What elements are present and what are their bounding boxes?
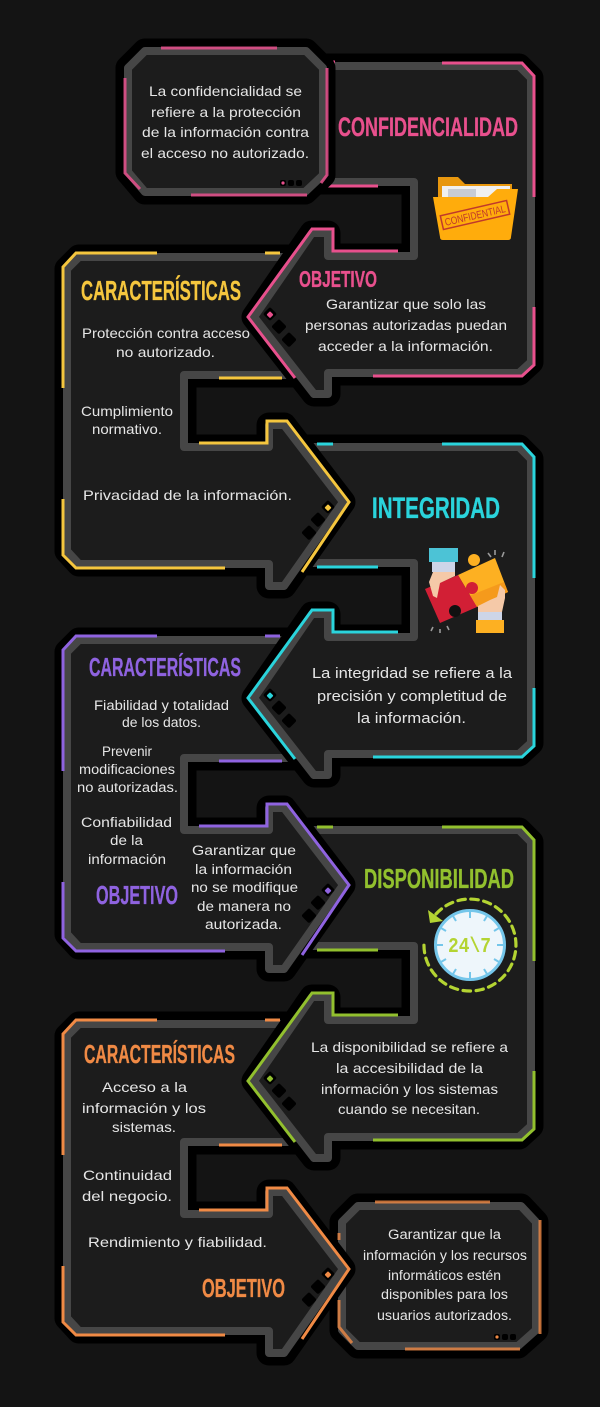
text: integrity definition: la información. <box>357 710 466 727</box>
panel: integridad características arrow <box>63 636 349 969</box>
text: integrity objective: de manera no <box>197 899 291 914</box>
text: confidentiality definition: La confidencialidad se <box>149 83 302 99</box>
text: características disponibilidad: Acceso a la <box>102 1079 187 1095</box>
text: availability objective: usuarios autorizados. <box>377 1308 512 1323</box>
text: características confidencialidad: Cumplimiento <box>81 403 173 419</box>
text: availability definition: La disponibilidad se refiere a <box>311 1039 508 1055</box>
text: características integridad: información <box>88 852 166 867</box>
text: integrity definition <box>312 665 513 727</box>
panel: confidentiality definition callout <box>125 48 327 195</box>
heading: disponibilidad: DISPONIBILIDAD <box>364 863 514 894</box>
text: availability objective: información y los recursos <box>363 1248 527 1263</box>
icon: 24/7 clock: 24\7 <box>448 936 491 959</box>
text: características disponibilidad <box>82 1079 267 1250</box>
text: características integridad: de la <box>110 833 144 848</box>
panel: confidencialidad características arrow <box>63 253 349 586</box>
text: características integridad: de los datos. <box>122 715 201 730</box>
text: confidentiality definition: el acceso no autorizado. <box>141 145 309 161</box>
heading: objetivo integridad: OBJETIVO <box>96 880 178 910</box>
text: availability objective: informáticos estén <box>388 1268 501 1283</box>
panel: confidencialidad <box>248 62 534 394</box>
text: availability objective: disponibles para los <box>381 1287 508 1302</box>
text: características confidencialidad: no autorizado. <box>116 344 215 360</box>
text: características integridad: Fiabilidad y totalidad <box>94 698 229 713</box>
text: características disponibilidad: del negocio. <box>82 1188 172 1204</box>
text: características disponibilidad: Continuidad <box>83 1167 172 1183</box>
panel: integridad <box>248 444 534 775</box>
panel: disponibilidad características arrow <box>63 1020 349 1353</box>
heading: características naranja: CARACTERÍSTICAS <box>84 1039 235 1069</box>
text: availability objective: Garantizar que la <box>388 1227 502 1242</box>
text: características disponibilidad: Rendimiento y fiabilidad. <box>88 1234 267 1250</box>
text: integrity objective: Garantizar que <box>192 843 296 858</box>
icon: confidential folder: CONFIDENTIAL <box>444 203 507 229</box>
text: características integridad: Confiabilidad <box>81 815 172 830</box>
heading: objetivo confidencialidad: OBJETIVO <box>299 266 377 292</box>
text: características integridad: no autorizadas. <box>77 780 178 795</box>
text: integrity objective: autorizada. <box>205 917 282 932</box>
text: availability definition: la accesibilidad de la <box>336 1060 483 1076</box>
text: availability objective <box>363 1227 527 1323</box>
text: confidentiality definition: refiere a la protección <box>151 104 301 120</box>
heading: integridad: INTEGRIDAD <box>372 492 500 525</box>
heading: confidencialidad: CONFIDENCIALIDAD <box>338 112 518 142</box>
text: integrity definition: La integridad se refiere a la <box>312 665 513 682</box>
text: confidentiality definition: de la información contra <box>142 124 309 140</box>
text: características confidencialidad: Privacidad de la información. <box>83 487 292 503</box>
text: características integridad: Prevenir <box>102 744 152 759</box>
panel: final objective callout <box>339 1202 540 1349</box>
text: características confidencialidad <box>81 325 292 503</box>
text: características integridad <box>77 698 229 867</box>
heading: características amarillo: CARACTERÍSTICAS <box>81 275 241 306</box>
icon: hands joining puzzle <box>425 548 508 633</box>
text: características disponibilidad: información y los <box>82 1100 206 1116</box>
panel: disponibilidad <box>248 827 534 1158</box>
text: características confidencialidad: Protección contra acceso <box>82 325 250 341</box>
heading: objetivo disponibilidad: OBJETIVO <box>202 1273 285 1303</box>
text: confidentiality objective: personas autorizadas puedan <box>305 317 507 333</box>
icon: confidential folder <box>433 177 518 240</box>
text: integrity objective <box>191 843 298 932</box>
text: availability definition: cuando se necesitan. <box>338 1101 480 1117</box>
text: confidentiality definition <box>141 83 309 161</box>
text: availability definition <box>311 1039 508 1117</box>
text: integrity definition: precisión y completitud de <box>317 688 507 705</box>
text: integrity objective: la información <box>195 862 292 877</box>
text: confidentiality objective <box>305 296 507 354</box>
text: características integridad: modificaciones <box>79 762 175 777</box>
text: integrity objective: no se modifique <box>191 880 298 895</box>
text: availability definition: información y los sistemas <box>321 1081 498 1097</box>
icon: 24/7 clock <box>424 899 516 991</box>
heading: características morado: CARACTERÍSTICAS <box>89 652 241 682</box>
text: confidentiality objective: acceder a la información. <box>318 338 493 354</box>
text: confidentiality objective: Garantizar que solo las <box>326 296 486 312</box>
text: características disponibilidad: sistemas. <box>112 1119 176 1135</box>
text: características confidencialidad: normativo. <box>92 421 162 437</box>
